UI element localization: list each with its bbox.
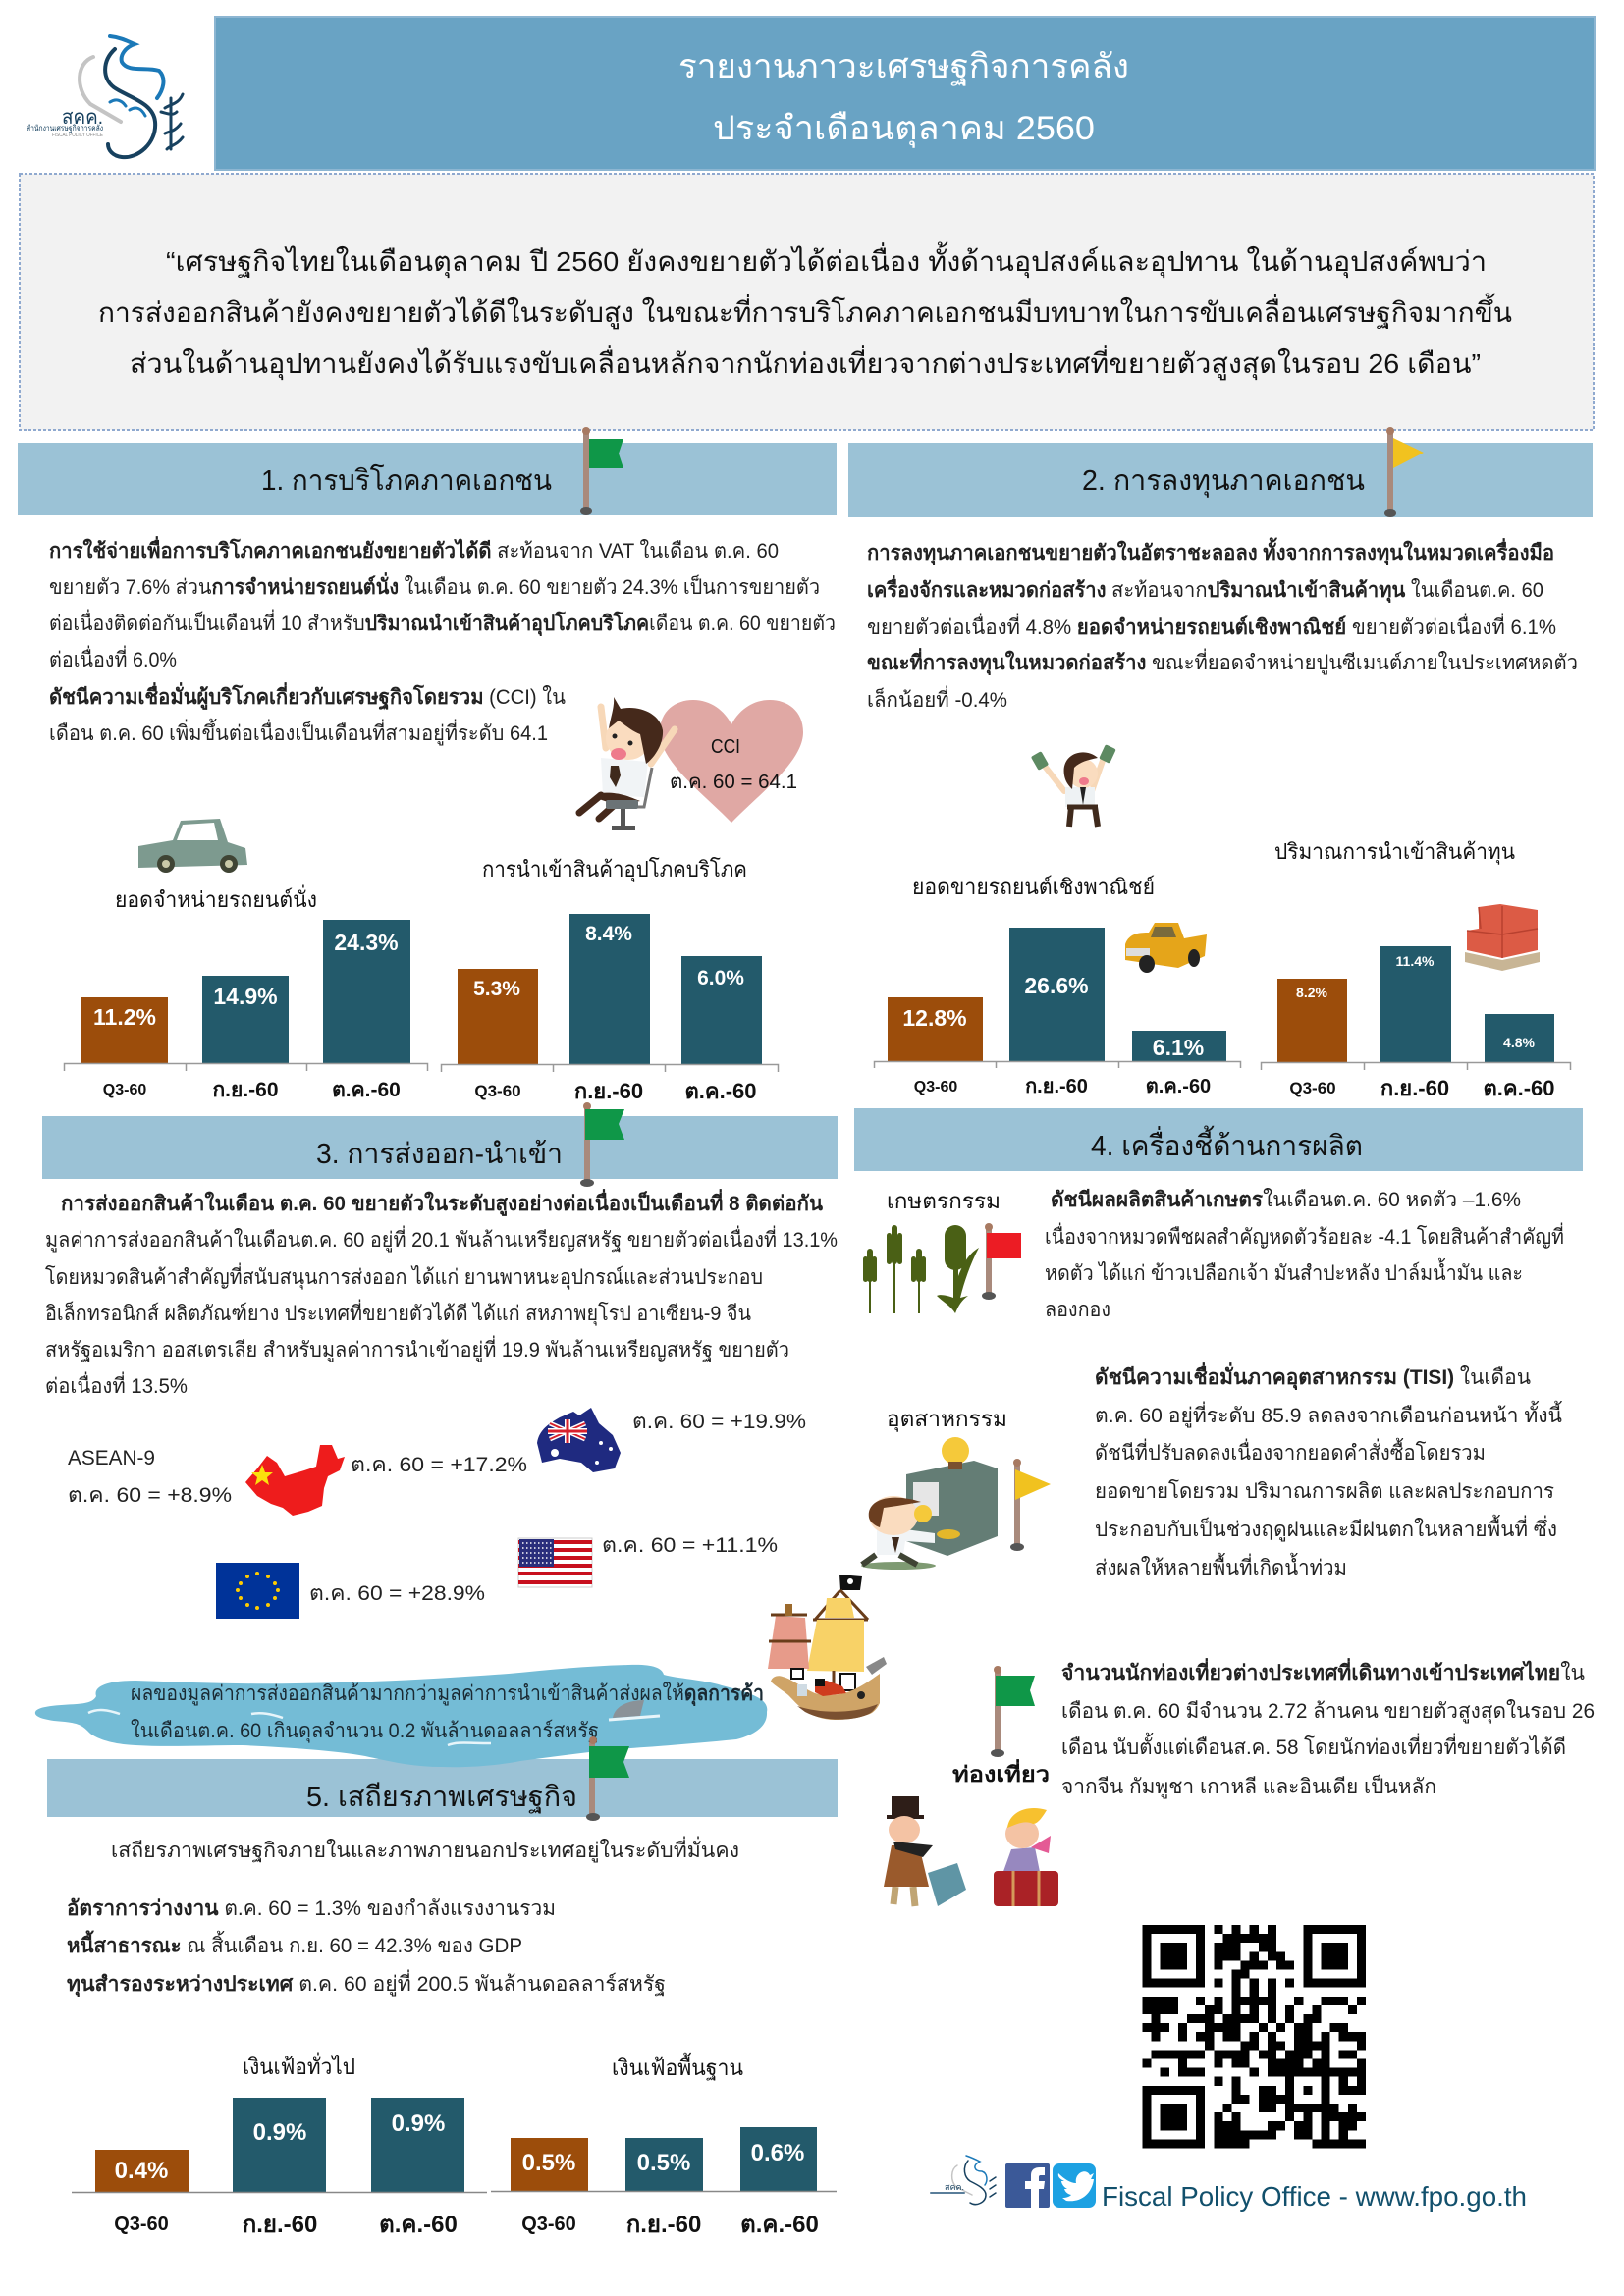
label: United States: ต.ค. 60 = +11.1% — [602, 1534, 778, 1557]
bar chart: core inflation: 0.5% — [522, 2150, 575, 2176]
bar chart: passenger car sales: 11.2% — [93, 1004, 156, 1030]
text block: industry: ต.ค. 60 อยู่ที่ระดับ 85.9 ลดลงจากเดือนก่อนหน้า ทั้งนี้ — [1095, 1401, 1562, 1428]
bar chart: core inflation: ต.ค.-60 — [740, 2212, 819, 2238]
icon: Australia map flag — [537, 1408, 621, 1472]
text block: consumption — [49, 535, 836, 746]
text block: investment: เครื่องจักรและหมวดก่อสร้าง สะท้อนจากปริมาณนำเข้าสินค้าทุน ในเดือนต.ค. 60 — [867, 574, 1543, 604]
bar chart: capital goods imports: Q3-60 — [1289, 1079, 1336, 1097]
text block: industry: ดัชนีที่ปรับลดลงเนื่องจากยอดคำสั่งซื้อโดยรวม — [1095, 1438, 1486, 1465]
icon: tourist girl on suitcase — [994, 1808, 1058, 1906]
text block: stability indicators: ทุนสำรองระหว่างประเทศ ต.ค. 60 อยู่ที่ 200.5 พันล้านดอลลาร์สหรัฐ — [67, 1969, 666, 1998]
bar chart: headline inflation: ก.ย.-60 — [243, 2212, 317, 2238]
summary quote panel — [20, 174, 1594, 430]
text block: tourism — [1061, 1657, 1595, 1799]
text block: tourism: จากจีน กัมพูชา เกาหลี และอินเดีย เป็นหลัก — [1061, 1773, 1436, 1799]
bar chart: core inflation — [491, 2053, 837, 2238]
sea with trade balance callout — [35, 1665, 767, 1767]
text block: exports: การส่งออกสินค้าในเดือน ต.ค. 60 ขยายตัวในระดับสูงอย่างต่อเนื่องเป็นเดือนที่ 8 ติดต่อกัน — [61, 1188, 824, 1217]
bar chart: capital goods imports: 11.4% — [1396, 953, 1435, 969]
icon: man holding money — [1031, 744, 1116, 827]
header title panel: รายงานภาวะเศรษฐกิจการคลัง — [678, 48, 1129, 86]
bar chart: core inflation: 0.6% — [751, 2140, 804, 2166]
bar chart: headline inflation — [72, 2052, 487, 2238]
bar chart: consumer goods imports: 8.4% — [585, 923, 632, 945]
heading 4: 4. เครื่องชี้ด้านการผลิต — [1091, 1125, 1363, 1162]
icon: green flag 1 — [580, 427, 623, 515]
text block: stability indicators: อัตราการว่างงาน ต.ค. 60 = 1.3% ของกำลังแรงงานรวม — [67, 1897, 556, 1920]
icon: US flag — [518, 1538, 592, 1587]
icon: green flag 3 — [580, 1102, 624, 1187]
bar chart: consumer goods imports: 6.0% — [697, 967, 744, 989]
icon: Facebook — [1005, 2163, 1050, 2208]
text block: exports: โดยหมวดสินค้าสำคัญที่สนับสนุนการส่งออก ได้แก่ ยานพาหนะอุปกรณ์และส่วนประกอบ — [45, 1262, 763, 1290]
panel 5: economic stability — [67, 1736, 837, 2238]
icon: Twitter — [1053, 2163, 1096, 2208]
label: Australia: ต.ค. 60 = +19.9% — [632, 1411, 806, 1433]
bar chart: capital goods imports: ก.ย.-60 — [1380, 1076, 1449, 1100]
text block: investment: เล็กน้อยที่ -0.4% — [867, 685, 1007, 712]
text block: industry: ส่งผลให้หลายพื้นที่เกิดน้ำท่วม — [1095, 1553, 1347, 1579]
sea with trade balance callout: ผลของมูลค่าการส่งออกสินค้ามากกว่ามูลค่าการนำเข้าสินค้าส่งผลให้ดุลการค้า — [131, 1682, 764, 1707]
icon: wheat and corn — [863, 1225, 979, 1313]
bar chart: core inflation: Q3-60 — [521, 2214, 576, 2235]
bar chart: consumer goods imports: 5.3% — [473, 978, 520, 1000]
bar chart: commercial car sales: Q3-60 — [914, 1079, 957, 1095]
heading 3 — [42, 1116, 838, 1179]
bar chart: capital goods imports: 8.2% — [1296, 985, 1328, 1000]
bar chart: headline inflation: 0.9% — [392, 2110, 445, 2137]
panel 1: private consumption — [18, 427, 837, 1103]
sea with trade balance callout: ในเดือนต.ค. 60 เกินดุลจำนวน 0.2 พันล้านดอลลาร์สหรัฐ — [131, 1719, 599, 1743]
bar chart: consumer goods imports: Q3-60 — [474, 1082, 521, 1100]
text block: exports: มูลค่าการส่งออกสินค้าในเดือนต.ค. 60 อยู่ที่ 20.1 พันล้านเหรียญสหรัฐ ขยายตัวต่อเนื่องที่ 13.1% — [45, 1225, 838, 1253]
icon: man with idea machine — [861, 1437, 998, 1570]
panel 5 heading background — [47, 1759, 838, 1817]
text block: stability intro: เสถียรภาพเศรษฐกิจภายในและภาพภายนอกประเทศอยู่ในระดับที่มั่นคง — [111, 1836, 739, 1863]
header title panel: ประจำเดือนตุลาคม 2560 — [713, 110, 1095, 148]
icon: yellow flag — [1010, 1459, 1051, 1551]
bar chart: commercial car sales: ยอดขายรถยนต์เชิงพาณิชย์ — [912, 875, 1155, 899]
text block: exports: สหรัฐอเมริกา ออสเตรเลีย สำหรับมูลค่าการนำเข้าอยู่ที่ 19.9 พันล้านเหรียญสหรัฐ ขยายตัว — [45, 1335, 789, 1362]
text block: industry: ดัชนีความเชื่อมั่นภาคอุตสาหกรรม (TISI) ในเดือน — [1095, 1362, 1531, 1391]
bar chart: core inflation: เงินเฟ้อพื้นฐาน — [612, 2053, 743, 2081]
logo: Fiscal Policy Office: สคค. — [62, 107, 103, 129]
bar chart: passenger car sales: 14.9% — [213, 984, 278, 1009]
bar chart: headline inflation: ต.ค.-60 — [379, 2212, 458, 2238]
logo: Fiscal Policy Office: FISCAL POLICY OFFICE — [52, 133, 104, 138]
bar chart: consumer goods imports: ต.ค.-60 — [684, 1079, 757, 1103]
label: ASEAN-9 — [68, 1447, 232, 1507]
QR code — [1143, 1925, 1366, 2148]
icon: small logo — [931, 2156, 996, 2205]
bar chart: passenger car sales: ก.ย.-60 — [212, 1079, 279, 1101]
panel 2: private investment — [848, 427, 1593, 1100]
logo: Fiscal Policy Office: สำนักงานเศรษฐกิจการคลัง — [27, 124, 103, 133]
bar chart: capital goods imports — [1261, 839, 1571, 1100]
footer: logo, social icons and website — [931, 2156, 1527, 2212]
label: agriculture: เกษตรกรรม — [887, 1189, 1001, 1213]
bar chart: capital goods imports: ปริมาณการนำเข้าสินค้าทุน — [1274, 839, 1515, 865]
text block: stability indicators: หนี้สาธารณะ ณ สิ้นเดือน ก.ย. 60 = 42.3% ของ GDP — [67, 1930, 522, 1957]
label: tourism: ท่องเที่ยว — [952, 1758, 1050, 1787]
icon: EU flag — [216, 1563, 299, 1619]
label: China: ต.ค. 60 = +17.2% — [351, 1454, 527, 1476]
text block: consumption: ต่อเนื่องติดต่อกันเป็นเดือนที่ 10 สำหรับปริมาณนำเข้าสินค้าอุปโภคบริโภคเดือน ต.ค. 60 ขยายตัว — [49, 609, 836, 637]
icon: heart with CCI callout — [660, 700, 803, 823]
bar chart: headline inflation: เงินเฟ้อทั่วไป — [243, 2052, 355, 2079]
bar chart: core inflation: ก.ย.-60 — [626, 2212, 701, 2238]
bar chart: passenger car sales: ต.ค.-60 — [332, 1079, 401, 1101]
summary quote panel: “เศรษฐกิจไทยในเดือนตุลาคม ปี 2560 ยังคงขยายตัวได้ต่อเนื่อง ทั้งด้านอุปสงค์และอุปทาน ในด้านอุปสงค์พบว่า — [166, 241, 1487, 279]
icon: happy businessman on chair — [579, 697, 675, 830]
heading 3: 3. การส่งออก-นำเข้า — [316, 1139, 563, 1170]
text block: tourism: เดือน ต.ค. 60 มีจำนวน 2.72 ล้านคน ขยายตัวสูงสุดในรอบ 26 — [1061, 1699, 1595, 1724]
bar chart: commercial car sales: 26.6% — [1024, 973, 1089, 998]
icon: boxes on pallet — [1465, 904, 1540, 971]
bar chart: consumer goods imports: การนำเข้าสินค้าอุปโภคบริโภค — [482, 857, 747, 882]
text block: consumption: เดือน ต.ค. 60 เพิ่มขึ้นต่อเนื่องเป็นเดือนที่สามอยู่ที่ระดับ 64.1 — [49, 719, 548, 746]
icon: China map flag — [245, 1445, 345, 1516]
label: industry: อุตสาหกรรม — [887, 1407, 1007, 1432]
text block: investment: ขณะที่การลงทุนในหมวดก่อสร้าง ขณะที่ยอดจำหน่ายปูนซีเมนต์ภายในประเทศหดตัว — [867, 647, 1578, 676]
text block: tourism: จำนวนนักท่องเที่ยวต่างประเทศที่เดินทางเข้าประเทศไทยใน — [1061, 1657, 1585, 1684]
bar chart: capital goods imports: 4.8% — [1503, 1035, 1536, 1050]
heading 2 — [848, 443, 1593, 517]
text block: agriculture — [1045, 1188, 1564, 1321]
icon: tourist man with suitcase — [884, 1796, 966, 1906]
text block: exports: ต่อเนื่องที่ 13.5% — [45, 1371, 188, 1398]
text block: investment: การลงทุนภาคเอกชนขยายตัวในอัตราชะลอลง ทั้งจากการลงทุนในหมวดเครื่องมือ — [867, 537, 1554, 566]
bar chart: passenger car sales: ยอดจำหน่ายรถยนต์นั่ง — [115, 884, 317, 912]
text block: stability indicators — [67, 1897, 666, 1998]
text block: agriculture: ลองกอง — [1045, 1299, 1110, 1321]
text block: exports — [45, 1188, 838, 1398]
bar chart: commercial car sales: 6.1% — [1153, 1035, 1204, 1060]
text block: investment: ขยายตัวต่อเนื่องที่ 4.8% ยอดจำหน่ายรถยนต์เชิงพาณิชย์ ขยายตัวต่อเนื่องที่ 6.1% — [867, 613, 1556, 639]
heading 4 — [854, 1108, 1583, 1171]
bar chart: passenger car sales: 24.3% — [334, 930, 399, 955]
icon: small logo: สคค. — [945, 2182, 964, 2192]
text block: consumption: ขยายตัว 7.6% ส่วนการจำหน่ายรถยนต์นั่ง ในเดือน ต.ค. 60 ขยายตัว 24.3% เป็นการขยายตัว — [49, 571, 820, 599]
summary quote panel: การส่งออกสินค้ายังคงขยายตัวได้ดีในระดับสูง ในขณะที่การบริโภคภาคเอกชนมีบทบาทในการขับเคลื่อนเศรษฐกิจมากขึ้น — [98, 293, 1512, 330]
bar chart: commercial car sales: ต.ค.-60 — [1146, 1076, 1211, 1097]
heading 2: 2. การลงทุนภาคเอกชน — [1082, 465, 1365, 498]
bar chart: consumer goods imports: ก.ย.-60 — [574, 1079, 643, 1103]
text block: agriculture: หดตัว ได้แก่ ข้าวเปลือกเจ้า มันสำปะหลัง ปาล์มน้ำมัน และ — [1045, 1258, 1523, 1285]
label: European Union: ต.ค. 60 = +28.9% — [309, 1582, 485, 1605]
icon: red flag — [982, 1223, 1021, 1300]
text block: agriculture: เนื่องจากหมวดพืชผลสำคัญหดตัวร้อยละ -4.1 โดยสินค้าสำคัญที่ — [1045, 1222, 1564, 1249]
bar chart: commercial car sales: 12.8% — [902, 1005, 967, 1031]
heading 1 — [18, 443, 837, 515]
text block: consumption: ต่อเนื่องที่ 6.0% — [49, 645, 177, 671]
bar chart: capital goods imports: ต.ค.-60 — [1483, 1076, 1555, 1100]
logo: Fiscal Policy Office — [27, 36, 183, 157]
bar chart: headline inflation: 0.9% — [253, 2119, 306, 2146]
header title panel — [215, 17, 1595, 170]
text block: tourism: เดือน นับตั้งแต่เดือนส.ค. 58 โดยนักท่องเที่ยวที่ขยายตัวได้ดี — [1061, 1733, 1566, 1759]
icon: yellow flag 2 — [1384, 427, 1424, 517]
label: ASEAN-9: ASEAN-9 — [68, 1447, 155, 1469]
text block: agriculture: ดัชนีผลผลิตสินค้าเกษตรในเดือนต.ค. 60 หดตัว –1.6% — [1051, 1188, 1521, 1211]
icon: yellow pickup truck — [1125, 923, 1207, 973]
website text: Fiscal Policy Office - www.fpo.go.th — [1102, 2181, 1527, 2212]
text block: consumption: ดัชนีความเชื่อมั่นผู้บริโภคเกี่ยวกับเศรษฐกิจโดยรวม (CCI) ใน — [49, 681, 566, 711]
bar chart: commercial car sales — [874, 875, 1241, 1097]
text block: industry — [1095, 1362, 1562, 1579]
text block: investment — [867, 537, 1578, 712]
text block: consumption: การใช้จ่ายเพื่อการบริโภคภาคเอกชนยังขยายตัวได้ดี สะท้อนจาก VAT ในเดือน ต.ค. 60 — [49, 535, 779, 562]
heading 1: 1. การบริโภคภาคเอกชน — [261, 463, 552, 497]
bar chart: headline inflation: 0.4% — [115, 2158, 168, 2184]
bar chart: passenger car sales — [65, 884, 428, 1101]
bar chart: passenger car sales: Q3-60 — [103, 1082, 146, 1098]
icon: heart with CCI callout: ต.ค. 60 = 64.1 — [670, 772, 797, 793]
text block: industry: ประกอบกับเป็นช่วงฤดูฝนและมีฝนตกในหลายพื้นที่ ซึ่ง — [1095, 1515, 1557, 1542]
summary quote panel: ส่วนในด้านอุปทานยังคงได้รับแรงขับเคลื่อนหลักจากนักท่องเที่ยวจากต่างประเทศที่ขยายตัวสูงสุดในรอบ 26 เดือน” — [130, 345, 1481, 381]
bar chart: consumer goods imports — [442, 857, 778, 1103]
text block: industry: ยอดขายโดยรวม ปริมาณการผลิต และผลประกอบการ — [1095, 1479, 1554, 1503]
bar chart: core inflation: 0.5% — [637, 2150, 690, 2176]
panel 3: exports and imports — [42, 1102, 838, 1619]
label: ASEAN-9: ต.ค. 60 = +8.9% — [68, 1484, 232, 1507]
text block: exports: อิเล็กทรอนิกส์ ผลิตภัณฑ์ยาง ประเทศที่ขยายตัวได้ดี ได้แก่ สหภาพยุโรป อาเซียน-9 จีน — [45, 1299, 751, 1326]
icon: grey car — [138, 819, 247, 873]
icon: green flag 5 — [586, 1736, 629, 1821]
icon: pirate ship — [768, 1575, 887, 1720]
icon: heart with CCI callout: CCI — [711, 736, 740, 758]
bar chart: headline inflation: Q3-60 — [114, 2214, 169, 2235]
heading 5: 5. เสถียรภาพเศรษฐกิจ — [306, 1782, 577, 1814]
panel 4: production indicators — [854, 1108, 1595, 1906]
bar chart: commercial car sales: ก.ย.-60 — [1025, 1076, 1088, 1097]
icon: green flag tourism — [991, 1666, 1035, 1757]
